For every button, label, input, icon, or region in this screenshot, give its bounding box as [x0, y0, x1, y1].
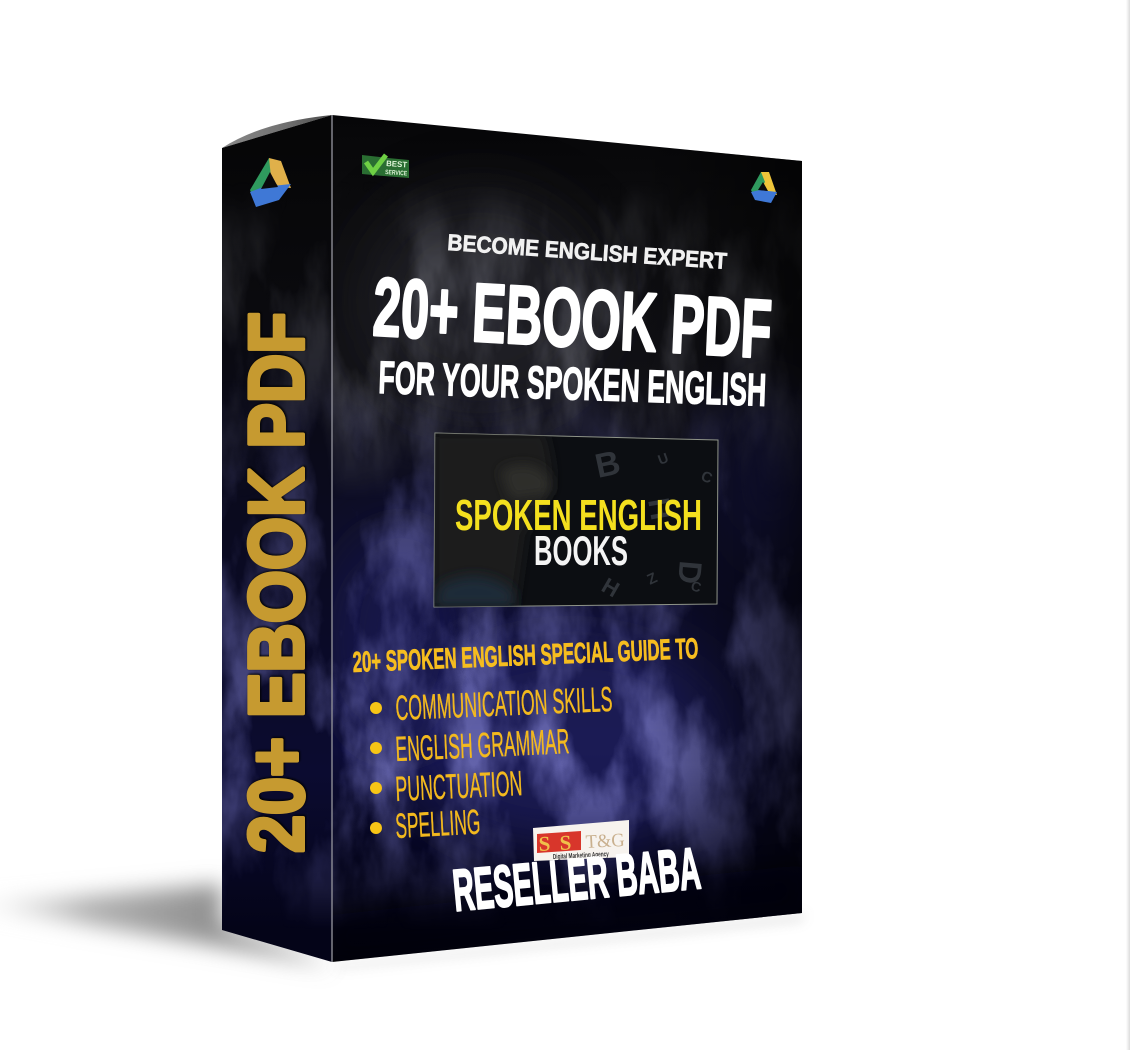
box top sliver — [222, 115, 332, 148]
image subheading: BOOKS — [534, 527, 628, 574]
agency logo: Digital Marketing Agency — [553, 851, 609, 861]
list items: PUNCTUATION — [395, 764, 523, 809]
scattered letters: U — [656, 449, 671, 468]
subtitle: FOR YOUR SPOKEN ENGLISH — [378, 351, 767, 416]
scattered letters: C — [699, 468, 715, 488]
tagline: BECOME ENGLISH EXPERT — [447, 229, 728, 274]
agency logo: T&G — [585, 830, 625, 853]
agency logo: S — [559, 830, 572, 855]
person silhouette — [434, 433, 553, 607]
best service badge — [362, 155, 409, 178]
icon: drive logo on side — [250, 158, 291, 207]
list items: ENGLISH GRAMMAR — [395, 722, 570, 769]
scattered letters: H — [641, 495, 677, 523]
page right edge — [1126, 0, 1130, 1050]
side title: 20+ EBOOK PDF — [232, 312, 320, 853]
scattered letters: C — [689, 577, 703, 596]
box front panel — [330, 110, 810, 970]
ground shadow — [0, 884, 806, 968]
guide list — [370, 680, 613, 846]
bullet dots — [370, 702, 382, 834]
image heading: SPOKEN ENGLISH — [455, 491, 702, 540]
brand name: RESELLER BABA — [450, 835, 703, 924]
icon: drive logo on front — [751, 172, 777, 203]
scattered letters: B — [592, 444, 624, 486]
list items: SPELLING — [394, 803, 481, 846]
list items — [394, 680, 613, 846]
agency logo: S — [538, 831, 551, 856]
scattered letters: D — [671, 559, 709, 586]
best service badge: BEST — [386, 159, 408, 169]
list items: COMMUNICATION SKILLS — [395, 680, 613, 728]
box side panel — [222, 115, 332, 962]
book image panel — [434, 433, 718, 607]
box corner edge — [331, 115, 333, 962]
best service badge: SERVICE — [385, 169, 408, 178]
smoke texture — [330, 110, 810, 970]
scattered letters — [596, 452, 712, 598]
scattered letters: Z — [645, 569, 660, 589]
guide heading: 20+ SPOKEN ENGLISH SPECIAL GUIDE TO — [352, 633, 699, 679]
agency logo — [533, 820, 629, 861]
scattered letters: H — [598, 573, 624, 602]
main title: 20+ EBOOK PDF — [371, 260, 774, 376]
